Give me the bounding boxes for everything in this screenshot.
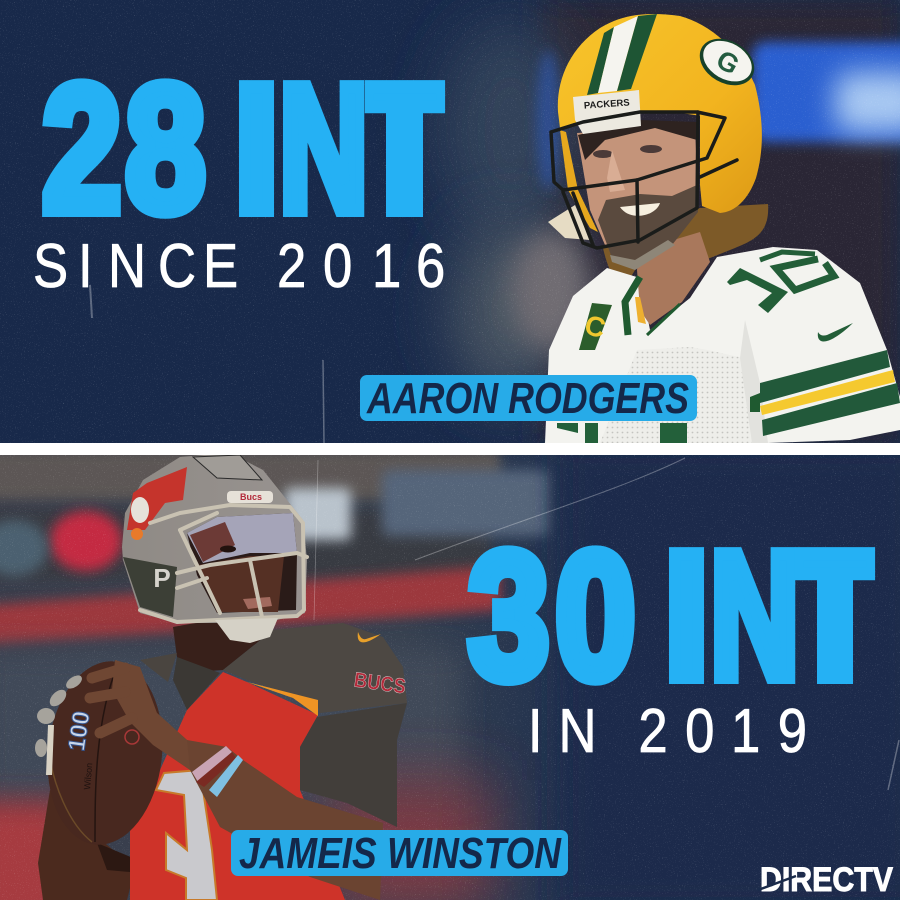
facemask: [551, 112, 737, 248]
skull decal: [131, 497, 149, 523]
stat: 30 INT: 3: [468, 515, 549, 716]
sleeve stripes: [750, 350, 900, 436]
stat: 28 INT: I: [234, 49, 279, 249]
scratches: [90, 285, 899, 790]
football: Wilson: [82, 762, 94, 790]
neck: [173, 623, 261, 671]
shoulder orange stripe: [247, 682, 318, 716]
stat: 30 INT: N: [710, 514, 799, 716]
side jaw guard: [123, 557, 177, 617]
panel: Aaron Rodgers: [0, 0, 900, 443]
jersey number 3: [156, 770, 217, 900]
jersey number 12: [727, 252, 834, 313]
helmet flag decal: [127, 467, 187, 530]
ball laces and glove fingers: [35, 673, 84, 775]
neck: [637, 232, 710, 325]
face: [198, 556, 284, 612]
near shoulder: [140, 653, 177, 682]
mesh panel: [600, 347, 762, 443]
collar: [625, 277, 640, 335]
helmet top panel: [193, 455, 262, 480]
smile: [620, 203, 660, 216]
lips: [243, 597, 272, 609]
helmet bumper: PACKERS: [584, 97, 630, 112]
visor: [187, 513, 297, 563]
facemask: [140, 505, 307, 622]
hand and fingers: [90, 660, 190, 770]
stat: 28 INT: 8: [125, 47, 205, 249]
brow shadow: [578, 120, 697, 160]
helmet bumper: Bucs: [240, 492, 262, 502]
captain patch: C: [581, 309, 609, 344]
nose: [607, 150, 625, 192]
football: 100: [63, 709, 96, 753]
eye: [220, 546, 236, 552]
icon: swoosh: [358, 632, 381, 642]
far arm: [38, 790, 135, 900]
football: [39, 656, 171, 850]
face opening: [187, 513, 297, 613]
stat: 30 INT: I: [664, 516, 709, 716]
orange dot: [131, 528, 143, 540]
beard: [598, 186, 698, 260]
shoulder: [223, 623, 407, 713]
helmet bumper: [573, 90, 641, 134]
collar orange: [635, 297, 646, 324]
jersey: [545, 247, 900, 443]
P logo: P: [153, 563, 171, 593]
panel background: [0, 0, 900, 443]
stat: 28 INT: 2: [42, 48, 121, 249]
panel: Jameis Winston: [0, 445, 900, 900]
shoulder pad: [548, 205, 590, 240]
helmet shell: [558, 14, 762, 213]
player: Jameis Winston: [35, 453, 407, 900]
icon: G logo: [700, 38, 754, 86]
collar right: [647, 304, 680, 335]
caption: since 2016: SINCE 2016: [33, 232, 445, 301]
torso red: [130, 672, 345, 900]
helmet stripe: [587, 14, 657, 95]
name tag: Aaron Rodgers: AARON RODGERS: [366, 374, 689, 423]
undershirt: [173, 657, 220, 710]
stat: 28 INT: [42, 47, 442, 249]
helmet inner edge: [560, 130, 598, 232]
icon: G logo: G: [711, 44, 744, 81]
forehead behind visor: [190, 522, 235, 562]
caption: in 2019: IN 2019: [528, 697, 807, 766]
player: Aaron Rodgers: [545, 14, 900, 443]
beard grey: [610, 240, 675, 270]
stat: 28 INT: T: [368, 48, 442, 249]
lower jersey number: [557, 423, 687, 443]
stat: 30 INT: [468, 514, 872, 716]
forearm: [153, 713, 383, 900]
stat: 30 INT: T: [798, 515, 872, 716]
eyes: [593, 150, 613, 158]
icon: swoosh: [818, 323, 853, 342]
elbow shadow: [98, 844, 130, 872]
sleeve shading: [740, 320, 768, 443]
panel background: [0, 445, 900, 900]
stat: 28 INT: N: [279, 47, 368, 249]
sleeve logo: BUCS: [353, 669, 407, 699]
face: [577, 128, 696, 248]
chin strap: [215, 618, 278, 643]
name tag: Jameis Winston: JAMEIS WINSTON: [239, 829, 562, 878]
stat: 30 INT: 0: [555, 514, 635, 716]
wristbands: [192, 746, 243, 797]
helmet bumper: [227, 491, 273, 503]
hair: [603, 204, 768, 276]
captain patch: [579, 303, 612, 350]
helmet shell: [122, 453, 307, 623]
sleeve: [300, 703, 407, 827]
